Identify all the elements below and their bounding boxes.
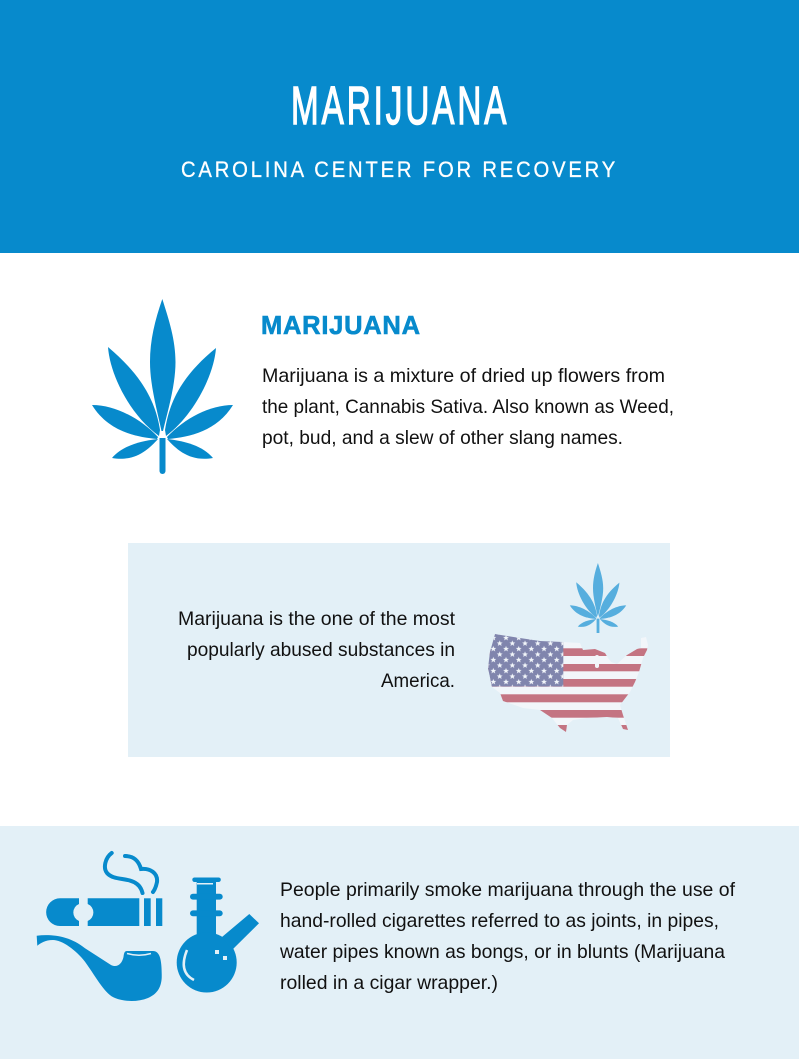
icon: tobacco pipe (37, 935, 162, 1001)
icon: USA map flag (488, 634, 648, 732)
description text (262, 365, 674, 449)
description text: water pipes known as bongs, or in blunts (Marijuana (279, 941, 725, 963)
icon: bong (177, 878, 259, 992)
panel: america statistic (128, 543, 670, 757)
callout text: America. (381, 670, 455, 692)
icon: cannabis leaf (92, 299, 233, 474)
callout text: Marijuana is the one of the most (178, 608, 456, 630)
icon: smoke (105, 853, 157, 893)
icon: smoking implements (37, 853, 259, 1001)
description text: the plant, Cannabis Sativa. Also known as Weed, (262, 396, 674, 418)
heading: MARIJUANA (261, 312, 420, 340)
description text: Marijuana is a mixture of dried up flowers from (262, 365, 665, 387)
panel: ways of smoking (0, 826, 799, 1059)
icon: cigar (46, 898, 162, 926)
callout text (178, 608, 456, 692)
callout text: popularly abused substances in (187, 639, 455, 661)
description text: hand-rolled cigarettes referred to as joints, in pipes, (280, 910, 719, 932)
icon: small cannabis leaf (570, 563, 626, 633)
description text: rolled in a cigar wrapper.) (280, 972, 498, 994)
header banner (0, 0, 799, 253)
description text (279, 879, 736, 994)
subtitle: CAROLINA CENTER FOR RECOVERY (181, 158, 615, 182)
section: what is marijuana (92, 299, 674, 474)
description text: People primarily smoke marijuana through the use of (280, 879, 736, 901)
description text: pot, bud, and a slew of other slang names. (262, 427, 623, 449)
title: MARIJUANA (291, 76, 509, 136)
